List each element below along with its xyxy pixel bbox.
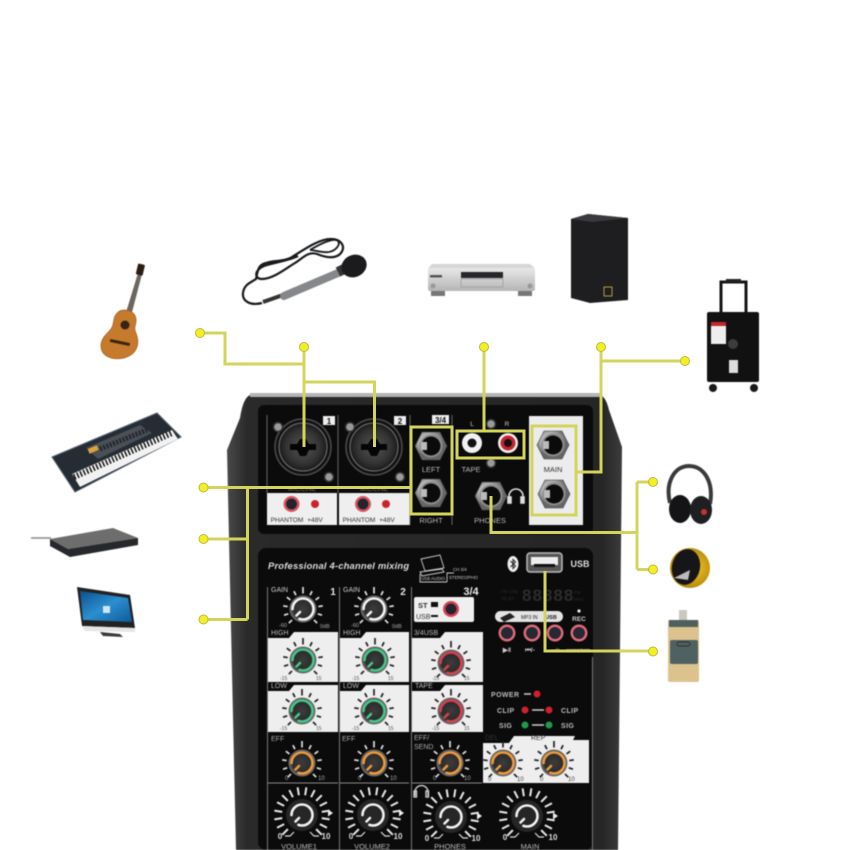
knob: eff 1	[282, 741, 322, 777]
MP3 mode pill: MP3 IN	[521, 615, 538, 621]
channel numbers: 1	[330, 587, 336, 598]
output knob scale: 0	[278, 832, 283, 841]
mixer device	[227, 393, 622, 850]
EQ scale labels: -15	[352, 726, 359, 732]
output knob scale: 0	[425, 834, 430, 843]
EQ scale labels: -15	[432, 676, 439, 682]
effect scale labels: 0	[358, 776, 362, 782]
phantom panel 2: +48V	[379, 517, 395, 524]
channel header labels: GAIN	[271, 587, 288, 594]
LED status cluster	[491, 690, 579, 730]
3/4 source switch panel: USB	[416, 614, 431, 621]
upper dividers	[267, 415, 452, 525]
output knob scale: 0	[349, 832, 354, 841]
panel: high and low EQ backgrounds	[268, 632, 589, 783]
LEFT label: LEFT	[422, 465, 441, 474]
icon: headphones	[508, 489, 524, 503]
icon: keyboard	[52, 413, 181, 492]
TAPE label: TAPE	[461, 465, 481, 474]
gain scale labels: 0dB	[320, 624, 330, 630]
USB label: USB	[570, 559, 590, 569]
EQ scale labels: 15	[316, 676, 322, 682]
R label: R	[505, 421, 510, 428]
LED display: FM	[574, 590, 581, 595]
channel numbers: 2	[400, 587, 406, 598]
transport labels: ▶‖	[502, 647, 511, 654]
column dividers	[268, 587, 592, 850]
LED status cluster: POWER	[491, 692, 519, 699]
output knob scale: 10	[322, 832, 331, 841]
knob: 3/4 USB	[431, 641, 471, 677]
phantom panel 2	[339, 493, 410, 525]
EQ scale labels: 15	[388, 726, 394, 732]
channel header labels: DEL	[485, 735, 499, 742]
box: left and right jacks	[411, 427, 452, 514]
routing labels	[421, 567, 478, 581]
knob: volume 2	[345, 787, 401, 835]
XLR combo input 1	[275, 419, 331, 475]
output knob scale: 10	[549, 833, 558, 842]
EQ scale labels: 15	[388, 676, 394, 682]
MIC/LINE label 1: MIC/LINE	[288, 486, 317, 493]
effect scale labels: 0	[285, 776, 289, 782]
routing labels: CH 3/4	[453, 567, 467, 572]
icon: phones headset	[414, 786, 428, 797]
routing labels: STEREO/PHO	[449, 575, 478, 580]
top bevel highlight	[250, 393, 600, 397]
knob: gain 1	[283, 587, 323, 623]
routing labels: USB AUDIO	[421, 576, 445, 581]
icon: yellow ball speaker	[669, 546, 710, 588]
EQ scale labels: -15	[280, 676, 287, 682]
icon: media box	[31, 528, 138, 557]
scale end brackets	[285, 832, 544, 838]
mixer body	[227, 395, 622, 850]
RIGHT label: RIGHT	[419, 516, 443, 525]
LED display: 88888	[522, 586, 574, 605]
knob: high 2	[355, 638, 395, 674]
box: tape RCA	[457, 431, 524, 458]
channel header labels: TAPE	[415, 683, 433, 690]
icon: bluetooth	[508, 556, 518, 572]
channel 2 label: 2	[398, 417, 403, 426]
EQ row tabs	[268, 632, 445, 691]
line: USB to flash drive	[545, 571, 653, 651]
line: phones to headphones	[491, 482, 653, 570]
effect scale labels: 10	[517, 777, 524, 783]
channel header labels: EFF	[342, 736, 355, 743]
knob: volume 1	[274, 787, 330, 835]
line: left inputs to keyboard and media	[203, 488, 411, 620]
transport labels	[502, 647, 590, 654]
EQ scale labels: 15	[464, 676, 470, 682]
main output panel	[529, 416, 583, 525]
channel header labels: EFF/	[414, 735, 429, 742]
EQ scale labels: -15	[432, 726, 439, 732]
transport labels: ⏮/-	[525, 647, 535, 654]
LED display: FM USB	[501, 589, 518, 594]
tagline: Professional 4-channel mixing	[268, 560, 409, 571]
knob: eff/send	[430, 741, 470, 777]
knob: eff 2	[354, 741, 394, 777]
output knob scale	[278, 832, 558, 843]
icon: PA speaker	[571, 214, 628, 303]
icon: USB flash drive	[668, 610, 699, 682]
output knob scale: 0	[503, 833, 508, 842]
knob: gain 2	[354, 587, 394, 623]
channel header labels: LOW	[343, 683, 359, 690]
knob: low 2	[354, 689, 394, 725]
effect scale labels: 10	[464, 776, 471, 782]
LED display: MP3	[574, 597, 584, 602]
phantom panel 1: PHANTOM	[271, 517, 303, 524]
EQ scale labels: 15	[464, 726, 470, 732]
effect scale labels: 10	[568, 777, 575, 783]
channel header labels: HIGH	[343, 630, 360, 637]
MP3 mode pill: USB	[545, 615, 557, 621]
XLR combo input 2	[346, 419, 402, 475]
output knob names	[281, 842, 539, 850]
channel header labels: REP	[531, 735, 546, 742]
phantom panel 2: PHANTOM	[343, 517, 375, 524]
connection dots	[196, 328, 690, 656]
MP3 mode pill	[495, 611, 563, 622]
phones jack	[475, 482, 507, 510]
LED display: SD BT	[501, 596, 515, 601]
effect scale labels	[285, 776, 575, 783]
level markers	[328, 810, 558, 820]
3/4 source switch panel: ST	[418, 601, 428, 610]
EQ scale labels: -15	[352, 676, 359, 682]
channel numbers	[330, 586, 480, 598]
upper connector panel	[258, 405, 593, 534]
channel 1 label: 1	[327, 417, 332, 426]
lower control panel	[258, 548, 593, 850]
effect scale labels: 10	[318, 776, 325, 782]
gain scale labels: -60	[351, 623, 359, 629]
icon: trolley speaker	[707, 279, 759, 392]
phantom panel 1: +48V	[307, 517, 323, 524]
LED status cluster: SIG	[561, 723, 574, 730]
effect scale labels: 10	[390, 776, 397, 782]
EQ scale labels: -15	[280, 726, 287, 732]
LED status cluster: SIG	[499, 723, 512, 730]
icon: acoustic guitar	[101, 263, 145, 359]
screws	[274, 420, 496, 482]
main output panel: MAIN	[544, 465, 562, 474]
channel numbers: 3/4	[463, 586, 480, 598]
knob: high 1	[283, 638, 323, 674]
EQ scale labels: 15	[316, 726, 322, 732]
channel header labels	[271, 587, 546, 751]
channel header labels: 3/4USB	[414, 630, 438, 637]
effect scale labels: 0	[433, 776, 437, 782]
effect scale labels: 0	[488, 777, 492, 783]
icon: over-ear headphones	[669, 466, 712, 524]
EQ scale labels	[280, 676, 470, 732]
PHONES label: PHONES	[474, 516, 506, 525]
knob: repeat	[534, 741, 574, 777]
LED display	[501, 586, 584, 605]
channel header labels: LOW	[271, 683, 287, 690]
output knob scale: 10	[472, 834, 481, 843]
gain scale labels	[279, 623, 402, 630]
channel 3/4 label	[432, 415, 449, 425]
channel 1 label	[323, 416, 335, 426]
gain scale labels: 0dB	[392, 624, 402, 630]
icon: DVD player	[428, 264, 535, 296]
channel header labels: GAIN	[343, 587, 360, 594]
transport labels: MODE/RPT	[566, 648, 590, 653]
icon: desktop monitor	[77, 587, 135, 637]
icon: laptop with routing	[420, 555, 454, 582]
line: guitar to XLR	[200, 333, 304, 364]
transport buttons	[498, 624, 588, 642]
channel header labels: HIGH	[271, 630, 288, 637]
knob: main	[499, 788, 555, 836]
line: speakers to main	[576, 347, 685, 472]
L label: L	[470, 421, 474, 428]
knob: low 1	[282, 689, 322, 725]
REC indicator: REC	[572, 616, 586, 623]
line: DVD to tape	[482, 347, 486, 431]
knob: delay	[483, 741, 523, 777]
line: microphone to XLR inputs	[304, 347, 374, 447]
RCA white	[462, 433, 482, 453]
left jack	[415, 432, 447, 460]
phantom panel 1	[267, 493, 337, 525]
output knob scale: 10	[394, 832, 403, 841]
LED status cluster: CLIP	[561, 708, 579, 715]
REC indicator	[572, 609, 586, 623]
knob: phones	[423, 789, 479, 837]
connection lines	[200, 333, 685, 651]
LED status cluster: CLIP	[497, 708, 515, 715]
box: main outputs	[532, 426, 576, 515]
USB port	[527, 553, 562, 572]
gain scale labels: -60	[279, 623, 287, 629]
knob: tape	[431, 689, 471, 725]
transport labels: ⏭/+	[552, 648, 560, 654]
device photos	[31, 214, 759, 682]
right jack	[415, 479, 447, 507]
icon: microphone with cable	[243, 239, 370, 304]
channel header labels: SEND	[414, 744, 433, 751]
3/4 source switch panel	[414, 597, 474, 622]
RCA red	[498, 433, 518, 453]
MIC/LINE label 2: MIC/LINE	[360, 486, 389, 493]
effect scale labels: 0	[540, 777, 544, 783]
section rules	[268, 782, 482, 784]
channel 2 label	[394, 416, 406, 426]
channel 3/4 label: 3/4	[435, 416, 447, 425]
channel header labels: EFF	[271, 736, 284, 743]
